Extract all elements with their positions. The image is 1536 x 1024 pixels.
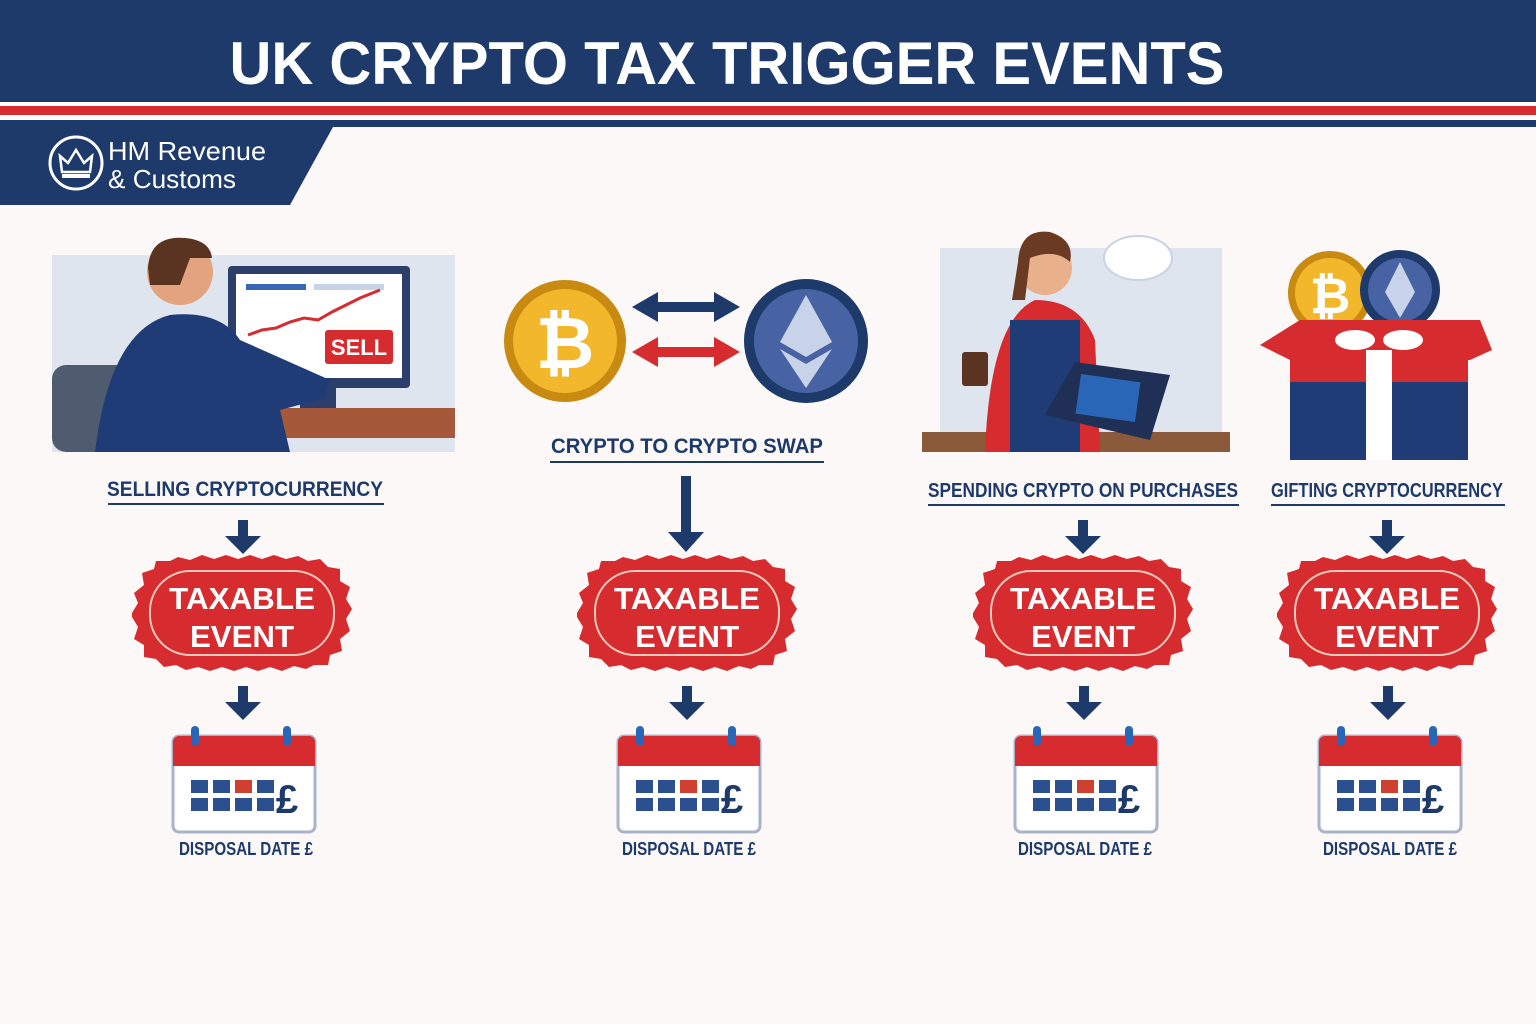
- panel: gift illustration: [1260, 250, 1492, 460]
- flow: column 2: DISPOSAL DATE £: [622, 839, 756, 859]
- panel: selling illustration: SELL: [331, 335, 387, 360]
- flow: column 3: [973, 520, 1193, 859]
- panel: swap coins: ₿: [536, 304, 594, 384]
- label: selling: SELLING CRYPTOCURRENCY: [107, 478, 383, 501]
- flow: column 4: DISPOSAL DATE £: [1323, 839, 1457, 859]
- flow: column 2: [577, 476, 797, 859]
- panel: selling illustration: [52, 238, 455, 452]
- panel: spending illustration: [922, 232, 1230, 452]
- flow: column 1: DISPOSAL DATE £: [179, 839, 313, 859]
- panel: swap coins: [504, 279, 868, 403]
- HMRC logo: [0, 127, 333, 205]
- flow: column 1: [132, 520, 352, 859]
- panel: gift illustration: ₿: [1310, 268, 1350, 324]
- title: UK CRYPTO TAX TRIGGER EVENTS: [230, 30, 1224, 97]
- HMRC logo: & Customs: [108, 164, 236, 194]
- label: spending: SPENDING CRYPTO ON PURCHASES: [928, 480, 1238, 502]
- HMRC logo: HM Revenue: [108, 136, 266, 166]
- header banner: [0, 0, 1536, 127]
- label: swap: CRYPTO TO CRYPTO SWAP: [551, 435, 823, 458]
- flow: column 4: [1277, 520, 1497, 859]
- flow: column 3: DISPOSAL DATE £: [1018, 839, 1152, 859]
